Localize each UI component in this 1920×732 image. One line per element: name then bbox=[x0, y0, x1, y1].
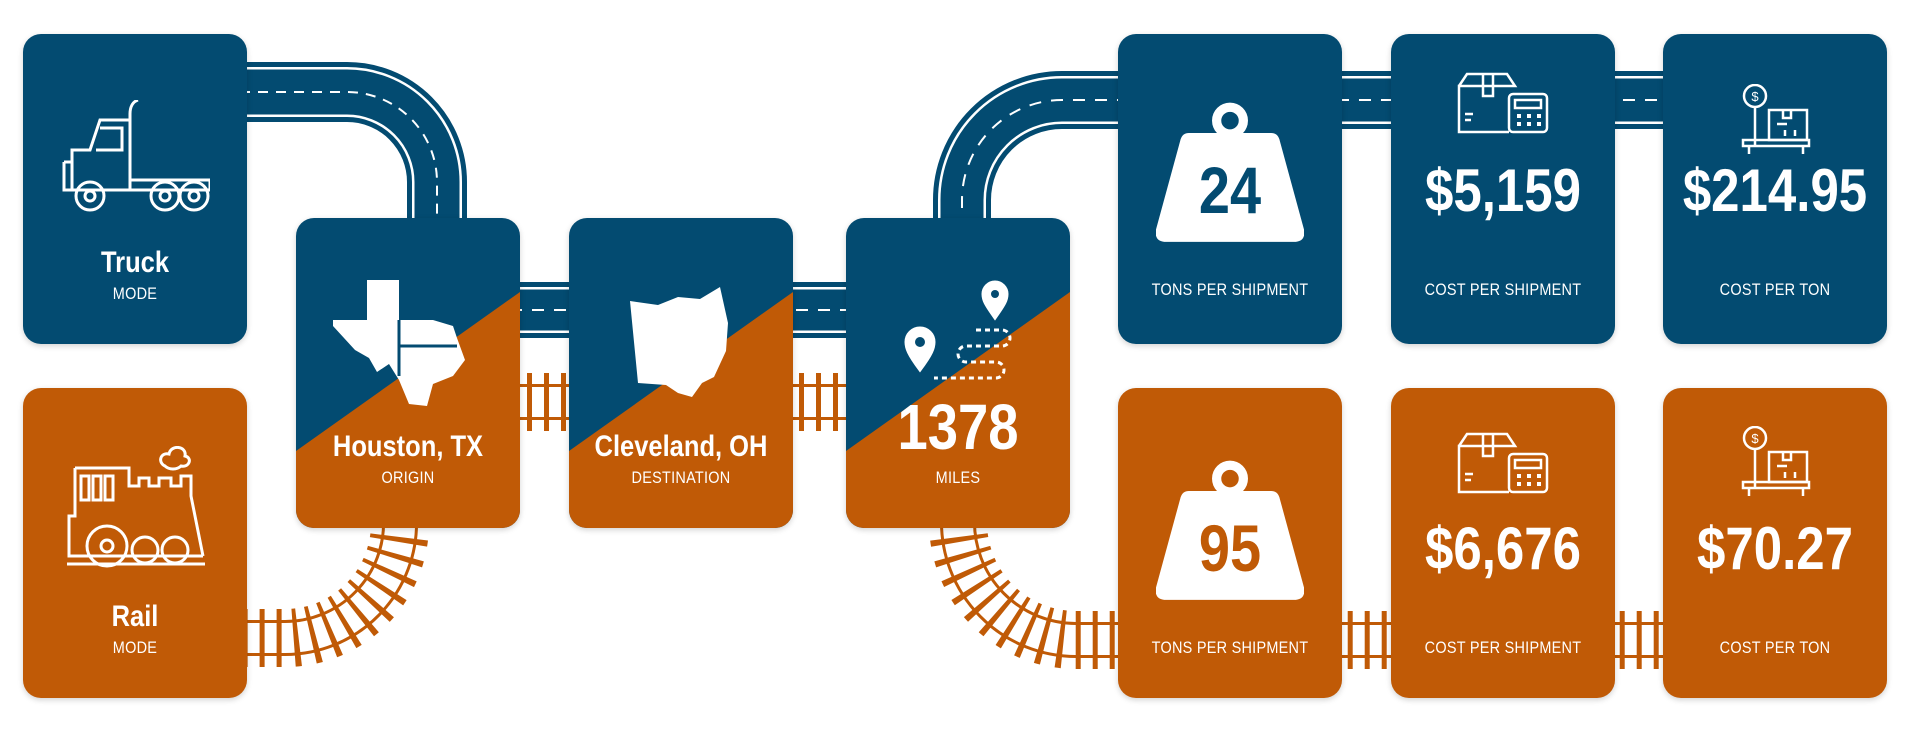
value: $6,676: $6,676 bbox=[1425, 515, 1581, 582]
panel: truck cost per shipment bbox=[1391, 34, 1615, 344]
panel: origin Houston bbox=[296, 218, 520, 528]
panel: rail cost per shipment bbox=[1391, 388, 1615, 698]
panel: truck mode bbox=[23, 34, 247, 344]
label: tons per shipment: TONS PER SHIPMENT bbox=[1152, 638, 1308, 657]
label: cost per shipment: COST PER SHIPMENT bbox=[1425, 280, 1581, 299]
heading: rail: Rail bbox=[112, 600, 158, 633]
road right bbox=[962, 100, 1700, 230]
heading: Cleveland, OH: Cleveland, OH bbox=[595, 430, 767, 463]
label: origin: ORIGIN bbox=[382, 468, 434, 487]
label: cost per ton: COST PER TON bbox=[1720, 638, 1830, 657]
icon: scale with dollar bbox=[1742, 84, 1810, 154]
icon: weight with 24: 24 bbox=[1199, 154, 1261, 227]
value: $5,159: $5,159 bbox=[1425, 157, 1581, 224]
panel: rail cost per ton bbox=[1663, 388, 1887, 698]
icon: weight with 24 bbox=[1156, 102, 1304, 242]
icon: weight with 95 bbox=[1156, 460, 1304, 600]
value: $70.27: $70.27 bbox=[1697, 515, 1853, 582]
rails right bbox=[958, 520, 1700, 640]
road middle bbox=[510, 282, 860, 338]
panel: destination Cleveland bbox=[569, 218, 793, 528]
label: mode: MODE bbox=[113, 638, 157, 657]
icon: Ohio bbox=[630, 287, 728, 397]
label: destination: DESTINATION bbox=[632, 468, 730, 487]
icon: box and calculator bbox=[1458, 72, 1548, 134]
panel: truck cost per ton bbox=[1663, 34, 1887, 344]
icon: scale with dollar bbox=[1742, 426, 1810, 496]
icon: train bbox=[67, 446, 205, 568]
label: miles: MILES bbox=[936, 468, 980, 487]
value: $214.95: $214.95 bbox=[1683, 157, 1867, 224]
label: cost per shipment: COST PER SHIPMENT bbox=[1425, 638, 1581, 657]
icon: route pins bbox=[904, 280, 1012, 380]
icon: scale with dollar: $ bbox=[1751, 431, 1759, 446]
panel: truck tons bbox=[1118, 34, 1342, 344]
heading: Houston, TX: Houston, TX bbox=[333, 430, 483, 463]
number: 1378: 1378 bbox=[897, 391, 1019, 463]
panel: rail mode bbox=[23, 388, 247, 698]
icon: weight with 95: 95 bbox=[1199, 512, 1261, 585]
icon: Texas bbox=[333, 280, 465, 406]
heading: truck: Truck bbox=[101, 246, 169, 279]
rails left and middle bbox=[240, 402, 860, 638]
label: tons per shipment: TONS PER SHIPMENT bbox=[1152, 280, 1308, 299]
label: cost per ton: COST PER TON bbox=[1720, 280, 1830, 299]
label: mode: MODE bbox=[113, 284, 157, 303]
icon: box and calculator bbox=[1458, 432, 1548, 494]
icon: truck bbox=[62, 100, 210, 212]
panel: rail tons bbox=[1118, 388, 1342, 698]
panel: miles bbox=[846, 218, 1070, 528]
road left bbox=[240, 92, 437, 230]
icon: scale with dollar: $ bbox=[1751, 89, 1759, 104]
